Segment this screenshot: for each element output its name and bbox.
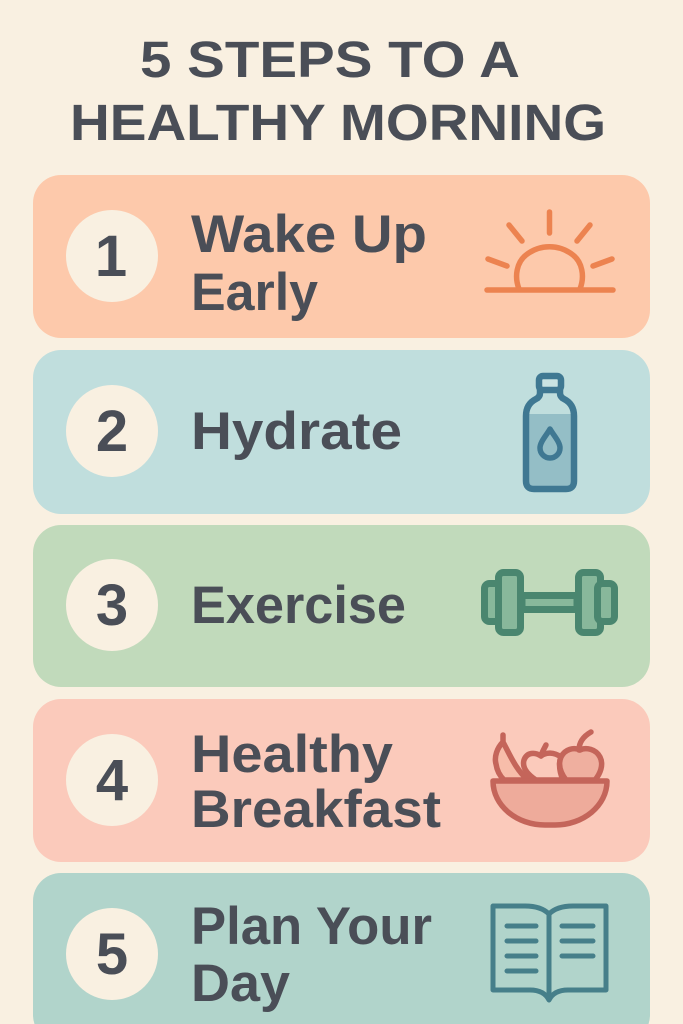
number badge 2 [66, 385, 158, 477]
icon: dumbbell [484, 572, 614, 632]
step 4 label: Breakfast [191, 780, 441, 839]
step 1 label [191, 205, 427, 322]
title [70, 31, 606, 151]
number badge 2: 2 [96, 399, 128, 464]
step 5 label: Day [191, 954, 291, 1013]
step 5 label [191, 897, 432, 1013]
icon: fruit bowl [493, 732, 607, 825]
number badge 4: 4 [96, 748, 128, 813]
icon: sunrise [487, 212, 613, 290]
icon: water bottle [526, 376, 574, 489]
icon: open book [493, 906, 606, 1000]
title: HEALTHY MORNING [70, 94, 606, 151]
number badge 1: 1 [95, 224, 127, 289]
panel: step 3 exercise [33, 525, 650, 687]
number badge 3 [66, 559, 158, 651]
number badge 3: 3 [96, 573, 128, 638]
step 1 label: Wake Up [191, 205, 427, 264]
number badge 5 [66, 908, 158, 1000]
panel: step 5 plan your day [33, 873, 650, 1024]
number badge 1 [66, 210, 158, 302]
step 2 label: Hydrate [191, 402, 402, 461]
title: 5 STEPS TO A [140, 31, 520, 88]
number badge 5: 5 [96, 922, 128, 987]
panel: step 2 hydrate [33, 350, 650, 514]
number badge 4 [66, 734, 158, 826]
step 3 label: Exercise [191, 576, 406, 635]
panel: step 1 wake up early [33, 175, 650, 338]
step 5 label: Plan Your [191, 897, 432, 956]
panel: step 4 healthy breakfast [33, 699, 650, 862]
step 4 label: Healthy [191, 725, 394, 784]
step 1 label: Early [191, 263, 319, 322]
step 4 label [191, 725, 441, 839]
